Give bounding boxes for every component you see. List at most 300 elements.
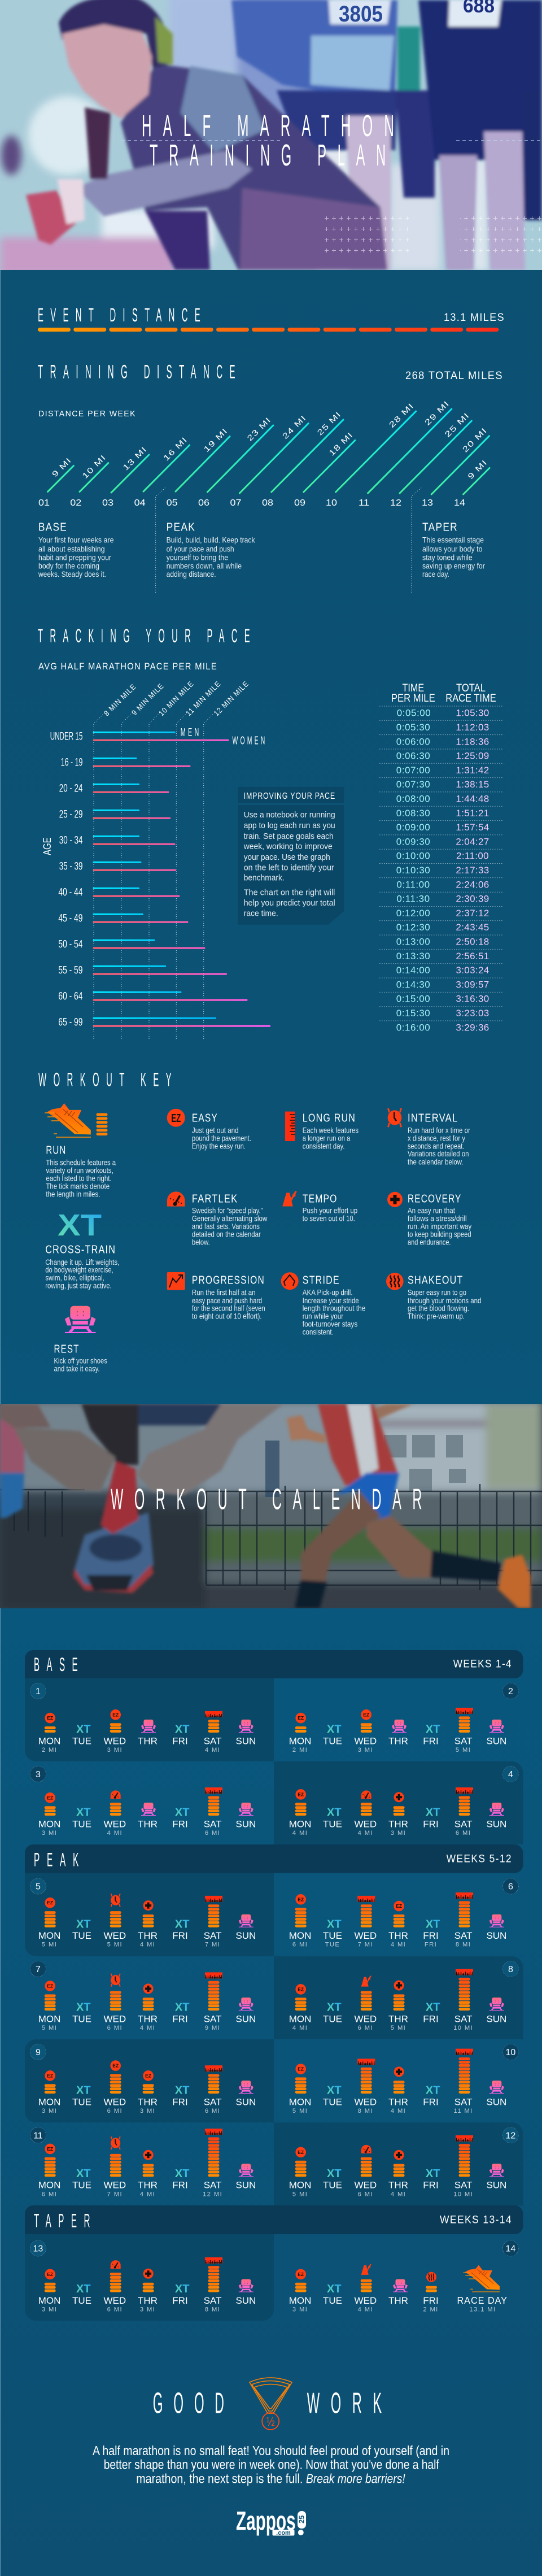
Fri cross-train (423, 2001, 440, 2024)
Sat long run: SAT (454, 1818, 473, 1829)
week number (502, 1961, 518, 1977)
key: interval (388, 1108, 470, 1167)
week number (502, 1878, 518, 1894)
table: pace to race time: PER MILE (391, 693, 435, 704)
week 12 (289, 2127, 518, 2198)
Sun rest: SUN (486, 2180, 506, 2191)
Sat long run: SAT (454, 2096, 473, 2107)
phase: taper: TAPER (422, 521, 458, 533)
Tue cross-train (72, 2085, 91, 2107)
Mon easy: EZ (298, 1986, 304, 1992)
key: progression: to eight out of 10 effort). (192, 1312, 262, 1321)
hero photo: runner checking her watch (0, 0, 542, 277)
week 6 (289, 1878, 518, 1948)
Sun rest: SUN (235, 1930, 256, 1941)
chart: distance per week: 18 MI (327, 430, 355, 458)
table: pace to race time: 3:03:24 (456, 965, 489, 976)
Thr rest: THR (388, 1735, 408, 1746)
Thr recovery: 3 MI (140, 2306, 155, 2313)
Mon easy: EZ (47, 1795, 53, 1800)
key: run: This schedule features a (46, 1158, 116, 1167)
Fri cross-train (423, 1724, 440, 1746)
text: EVENT DISTANCE (38, 304, 207, 326)
week number: 13 (33, 2244, 43, 2254)
phase: peak (167, 521, 255, 578)
race bib numbers (339, 0, 494, 21)
Tue cross-train: XT (76, 2283, 91, 2295)
Mon easy (38, 1981, 60, 2031)
key: interval: Run hard for x time or (408, 1125, 470, 1134)
week number: 10 (506, 2048, 515, 2057)
table: pace to race time: TOTAL (456, 682, 486, 694)
Mon easy: MON (289, 2295, 311, 2306)
Mon easy: EZ (47, 1900, 53, 1905)
Wed interval (103, 1894, 126, 1948)
Fri cross-train: XT (175, 1724, 189, 1736)
key: run: variety of run workouts, (46, 1166, 113, 1175)
event distance value: 13.1 MILES (444, 312, 505, 324)
Wed tempo (354, 1976, 377, 2031)
week number: 11 (33, 2131, 43, 2140)
Fri cross-train: XT (175, 2283, 189, 2295)
Wed tempo: WED (354, 2013, 377, 2024)
Fri cross-train: XT (175, 2085, 189, 2097)
text: TRAINING DISTANCE (38, 362, 242, 383)
section header: base (25, 1650, 523, 1678)
Wed fartlek: WED (354, 1818, 377, 1829)
icon: half marathon medal (250, 2378, 292, 2430)
key: rest: and take it easy. (54, 1364, 99, 1373)
row: 40-44: 40 - 44 (58, 887, 83, 899)
Mon easy (289, 1789, 311, 1837)
chart: pace by age: 9 MIN MILE (130, 682, 165, 717)
Sun rest (486, 2164, 506, 2191)
week number: 5 (36, 1882, 41, 1892)
Fri cross-train: XT (175, 1807, 189, 1819)
section header: taper (25, 2205, 523, 2234)
Tue cross-train: XT (76, 1807, 91, 1819)
Wed long run: WED (354, 1930, 377, 1941)
Fri cross-train: XT (426, 1918, 440, 1930)
week number: 9 (36, 2048, 41, 2057)
chart: distance per week: 14 (454, 498, 465, 508)
Tue cross-train: TUE (323, 2013, 342, 2024)
row: 35-39: 35 - 39 (59, 861, 82, 873)
week 5 (30, 1878, 256, 1948)
Thr recovery: 4 MI (391, 2191, 406, 2198)
Fri cross-train (423, 2085, 440, 2107)
chart: distance per week: 01 (38, 498, 50, 508)
Wed easy: WED (103, 2096, 126, 2107)
week 10 (289, 2044, 518, 2114)
Tue cross-train: XT (327, 1918, 342, 1930)
pace chart subtitle: AVG HALF MARATHON PACE PER MILE (38, 661, 217, 672)
Sat long run (204, 1896, 222, 1948)
Fri cross-train: FRI (172, 1930, 188, 1941)
row: 60-64: 60 - 64 (58, 991, 83, 1003)
Mon easy: 6 MI (42, 2191, 57, 2198)
Fri cross-train: XT (426, 2001, 440, 2014)
Wed easy (103, 1709, 126, 1753)
chart: distance per week: 16 MI (161, 435, 189, 463)
Mon easy: 5 MI (42, 1942, 57, 1948)
Sat long run: 6 MI (205, 1830, 220, 1837)
Wed interval: 5 MI (107, 1942, 123, 1948)
key: interval: x distance, rest for y (408, 1134, 465, 1143)
Mon easy: 5 MI (292, 2191, 308, 2198)
Wed fartlek: 4 MI (358, 1830, 373, 1837)
Mon easy: MON (38, 1735, 60, 1746)
key: cross-train (45, 1208, 119, 1290)
Fri cross-train: FRI (172, 1735, 188, 1746)
chart: distance per week: 19 MI (202, 426, 229, 454)
Sun rest: SUN (486, 2096, 506, 2107)
Thr rest (388, 2279, 408, 2306)
key: shakeout: Think: pre-warm up. (408, 1312, 465, 1321)
Thr easy (138, 2070, 158, 2114)
good work heading: GOOD (153, 2387, 235, 2420)
callout: improving your pace: The chart on the right will (244, 888, 335, 898)
Mon easy (289, 2147, 311, 2198)
Wed fartlek (103, 2260, 126, 2313)
key: recovery: run. An important way (408, 1221, 471, 1230)
Mon easy: 4 MI (292, 1830, 308, 1837)
section header: peak (25, 1844, 523, 1873)
Fri cross-train: XT (426, 2168, 440, 2180)
Sun rest (235, 2164, 256, 2191)
chart: distance per week (38, 399, 489, 508)
total training miles: 268 TOTAL MILES (405, 370, 503, 382)
chart: distance per week: 04 (134, 498, 146, 508)
Fri cross-train (423, 1918, 440, 1948)
Fri cross-train (172, 2283, 189, 2306)
chart: distance per week: 10 (326, 498, 337, 508)
table: pace to race time: 0:13:30 (396, 951, 430, 961)
week 11 (30, 2127, 256, 2198)
table: pace to race time: 0:15:00 (396, 994, 430, 1004)
Wed fartlek: 4 MI (107, 1830, 123, 1837)
Mon easy: 3 MI (42, 1830, 57, 1837)
key: easy: Just get out and (192, 1125, 239, 1134)
week number: 7 (36, 1965, 41, 1974)
Mon easy: MON (38, 2180, 60, 2191)
key: stride (281, 1272, 365, 1337)
Fri cross-train: XT (175, 2168, 189, 2180)
key: rest: REST (54, 1343, 79, 1356)
chart: distance per week: 02 (70, 498, 81, 508)
Tue cross-train (72, 1724, 91, 1746)
Wed easy (103, 2060, 126, 2114)
Tue cross-train: XT (327, 2168, 342, 2180)
Sat long run: 8 MI (205, 2306, 220, 2313)
key: rest (54, 1306, 107, 1373)
Sat long run: 5 MI (456, 1747, 471, 1753)
phase: taper: stay toned while (422, 552, 473, 562)
phase: base: all about establishing (38, 544, 105, 553)
chart: pace by age: 12 MIN MILE (212, 680, 251, 717)
chart: pace by age: 10 MIN MILE (157, 680, 195, 717)
Sat long run: 6 MI (456, 1830, 471, 1837)
axis label: AGE (42, 837, 54, 855)
key: tempo (282, 1191, 357, 1223)
chart: distance per week: 13 MI (121, 445, 148, 472)
section header: taper: WEEKS 13-14 (440, 2214, 512, 2226)
Sat long run (454, 1892, 473, 1948)
Sat long run: 12 MI (203, 2191, 222, 2198)
phase: base (38, 521, 114, 578)
table: pace to race time: 0:11:30 (396, 894, 430, 904)
Fri shakeout: 2 MI (423, 2306, 439, 2313)
Mon easy: 5 MI (292, 2108, 308, 2114)
Fri cross-train: FRI (172, 2096, 188, 2107)
Tue cross-train: XT (327, 1724, 342, 1736)
Tue cross-train: XT (327, 2085, 342, 2097)
table: pace to race time: 2:43:45 (456, 922, 489, 933)
Mon easy: EZ (298, 2066, 304, 2072)
table: pace to race time: 0:13:00 (396, 937, 430, 947)
Tue cross-train: TUE (323, 2180, 342, 2191)
Fri cross-train: FRI (172, 2295, 188, 2306)
Sat long run: SAT (454, 1735, 473, 1746)
row: 65-99: 65 - 99 (58, 1017, 82, 1029)
table: pace to race time: 3:23:03 (456, 1008, 489, 1019)
Fri cross-train: FRI (423, 2180, 439, 2191)
closing paragraph (93, 2443, 449, 2486)
Fri cross-train (172, 2085, 189, 2107)
table: pace to race time: 0:05:00 (397, 708, 431, 719)
phase: base: BASE (38, 521, 67, 533)
table: pace to race time: 0:12:30 (396, 922, 430, 933)
Sat long run: 4 MI (205, 1747, 220, 1753)
Sun rest: SUN (486, 2013, 506, 2024)
card backgrounds (25, 1678, 523, 2321)
Fri cross-train (172, 2001, 189, 2024)
week number: 12 (506, 2131, 515, 2140)
Tue cross-train: XT (76, 2168, 91, 2180)
Sun rest: SUN (486, 1818, 506, 1829)
Mon easy: EZ (298, 2272, 304, 2277)
event distance dashed bar (40, 328, 502, 332)
key: cross-train: Change it up. Lift weights, (45, 1257, 119, 1267)
chart: distance per week: 28 MI (387, 401, 416, 429)
Mon easy (38, 1792, 60, 1837)
Mon easy: 3 MI (42, 2108, 57, 2114)
Wed easy: 3 MI (358, 1747, 373, 1753)
phase: peak: yourself to bring the (167, 552, 228, 562)
phase: base: habit and prepping your (38, 552, 111, 562)
Wed fartlek: WED (354, 2180, 377, 2191)
table: pace to race time: 2:11:00 (456, 851, 489, 861)
Fri cross-train: FRI (172, 1818, 188, 1829)
key: fartlek: FARTLEK (192, 1193, 238, 1206)
Mon easy (289, 1984, 311, 2031)
Thr recovery: 4 MI (391, 2108, 406, 2114)
Sat long run (204, 2065, 222, 2114)
key: progression: Run the first half at an (192, 1288, 256, 1297)
Sun rest: SUN (235, 2096, 256, 2107)
Tue cross-train (72, 1918, 91, 1941)
key: tempo: Push your effort up (303, 1206, 357, 1215)
Sat long run: SAT (204, 1735, 222, 1746)
row: 45-49: 45 - 49 (58, 913, 82, 925)
key: fartlek: and fast sets. Variations (192, 1221, 260, 1230)
week 13 (30, 2240, 256, 2313)
text: WORKOUT KEY (38, 1069, 178, 1090)
chart: distance per week: 13 (422, 498, 433, 508)
key: run: the length in miles. (46, 1190, 100, 1199)
week number (30, 1961, 46, 1977)
Mon easy: EZ (47, 2146, 53, 2152)
week 9 (30, 2044, 256, 2114)
phase: peak: of your pace and push (167, 544, 234, 553)
Mon easy: MON (289, 1735, 311, 1746)
row: 30-34: 30 - 34 (59, 835, 83, 847)
Mon easy: 4 MI (292, 2025, 308, 2031)
Tue cross-train: TUE (323, 1735, 342, 1746)
Sun rest: SUN (235, 1818, 256, 1829)
key: long run: LONG RUN (303, 1112, 356, 1124)
Mon easy: EZ (47, 2272, 53, 2277)
callout: improving your pace: benchmark. (244, 873, 285, 883)
Mon easy (38, 2144, 60, 2198)
Tue cross-train: TUE (72, 1735, 91, 1746)
Fri cross-train: FRI (425, 1942, 437, 1948)
Thr recovery (388, 2066, 408, 2114)
Mon easy (38, 1898, 60, 1948)
title (142, 109, 405, 172)
Thr recovery (138, 1983, 158, 2031)
Tue cross-train (72, 1807, 91, 1829)
table: pace to race time: 0:08:30 (396, 808, 430, 819)
week number (30, 1878, 46, 1894)
Tue cross-train: TUE (323, 1930, 342, 1941)
Sat long run (204, 1972, 222, 2031)
key: cross-train: swim, bike, elliptical, (45, 1273, 104, 1282)
chart: distance per week: 06 (198, 498, 209, 508)
table: pace to race time: 0:15:30 (396, 1008, 430, 1019)
Fri cross-train: FRI (172, 2013, 188, 2024)
Sun rest (235, 1803, 256, 1829)
week 1 (30, 1683, 256, 1753)
Mon easy: MON (38, 2013, 60, 2024)
chart: distance per week: 24 MI (281, 413, 308, 441)
phase: peak: adding distance. (167, 569, 216, 578)
week number: 6 (508, 1882, 513, 1892)
Wed long run: 7 MI (358, 1942, 373, 1948)
Thr easy: EZ (145, 2073, 151, 2078)
week 2 (289, 1683, 518, 1753)
Sat long run: 10 MI (453, 2025, 473, 2031)
Sun rest (235, 2081, 256, 2107)
key: easy: Enjoy the easy run. (192, 1142, 246, 1151)
key: progression: PROGRESSION (192, 1274, 265, 1286)
Wed interval: WED (103, 2013, 126, 2024)
Mon easy: 3 MI (42, 2306, 57, 2313)
Sun rest (486, 1720, 506, 1746)
key: cross-train: do bodyweight exercise, (45, 1265, 113, 1274)
key: long run: Each week features (303, 1125, 359, 1134)
Thr recovery: THR (138, 2180, 158, 2191)
Tue cross-train (323, 1807, 342, 1829)
Mon easy (38, 1713, 60, 1753)
key: stride: foot-turnover stays (303, 1320, 357, 1329)
section header: peak: WEEKS 5-12 (447, 1853, 512, 1865)
week number (502, 2127, 518, 2143)
Wed easy: EZ (112, 2063, 119, 2069)
chart: distance per week: 03 (102, 498, 113, 508)
Fri cross-train (423, 2168, 440, 2191)
chart: distance per week: 9 MI (466, 458, 489, 481)
key: run: each listed to the right. (46, 1174, 112, 1183)
chart: distance per week: 05 (167, 498, 178, 508)
key: fartlek: Generally alternating slow (192, 1214, 268, 1223)
Mon easy: MON (38, 2295, 60, 2306)
row: 25-29: 25 - 29 (59, 809, 82, 821)
week 8 (289, 1961, 518, 2031)
logo: Zappos.com: .com (276, 2530, 291, 2536)
Sat long run (454, 1787, 473, 1837)
closing paragraph: marathon, the next step is the full. (136, 2471, 303, 2486)
Thr recovery: THR (388, 2096, 408, 2107)
Wed fartlek (354, 1790, 377, 1837)
Tue cross-train (323, 2283, 342, 2306)
Sat long run (204, 1711, 222, 1753)
text: WORK (307, 2387, 393, 2420)
phase: peak: Build, build, build. Keep track (167, 535, 255, 544)
Wed fartlek: WED (103, 2295, 126, 2306)
key: easy: EASY (192, 1112, 218, 1124)
key: easy (167, 1109, 251, 1151)
Tue cross-train: TUE (72, 1930, 91, 1941)
week number: 8 (508, 1965, 513, 1974)
Sat long run (204, 1787, 222, 1837)
Sat long run: SAT (204, 2096, 222, 2107)
Mon easy: EZ (47, 1983, 53, 1988)
key: fartlek: detailed on the calendar (192, 1229, 261, 1238)
key: recovery: RECOVERY (408, 1193, 462, 1206)
key: fartlek: Swedish for “speed play.” (192, 1206, 263, 1215)
Wed tempo: 6 MI (358, 2025, 373, 2031)
Wed fartlek: 6 MI (107, 2306, 123, 2313)
Mon easy: EZ (47, 2073, 53, 2078)
Sun rest (486, 2081, 506, 2107)
week number: 3 (36, 1770, 41, 1779)
Thr recovery (388, 1981, 408, 2031)
key: stride: consistent. (303, 1328, 334, 1337)
key: recovery (387, 1192, 471, 1247)
table: pace to race time: 1:57:54 (456, 822, 489, 833)
callout: improving your pace: app to log each run as you (244, 821, 335, 830)
Fri cross-train: FRI (423, 1735, 439, 1746)
table: pace to race time: 0:10:00 (396, 851, 430, 861)
key: shakeout: SHAKEOUT (408, 1274, 464, 1286)
Tue cross-train: TUE (323, 2295, 342, 2306)
phase: taper: race day. (422, 569, 449, 578)
key: tempo: TEMPO (303, 1193, 338, 1206)
table: pace to race time: 2:37:12 (456, 908, 489, 919)
Tue cross-train (323, 1918, 342, 1948)
race day (457, 2265, 508, 2313)
table: pace to race time: 0:11:00 (396, 879, 430, 890)
Mon easy (289, 1894, 311, 1948)
Thr easy: 3 MI (140, 2108, 155, 2114)
hero photo: lacing shoe and runner (0, 1401, 542, 1612)
chart: distance per week: 20 MI (460, 426, 489, 454)
key: stride: AKA Pick-up drill. (303, 1288, 353, 1297)
row: 16-19: 16 - 19 (61, 757, 82, 769)
table: pace to race time: 0:05:30 (396, 722, 430, 733)
week number: 2 (508, 1687, 513, 1696)
